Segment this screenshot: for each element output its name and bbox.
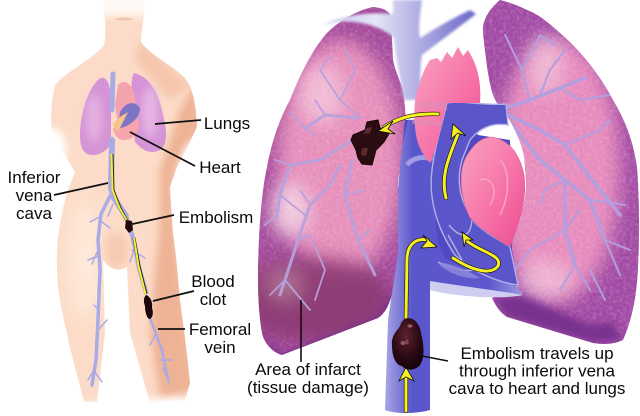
- yellow arrow: bottom of vena cava: [404, 377, 408, 411]
- leader lines, left figure: [54, 120, 201, 329]
- top vessels: [322, 0, 476, 100]
- soft fades at head, arms and feet: [90, 0, 160, 16]
- right lung: [480, 0, 640, 360]
- aorta (pink): [414, 47, 480, 163]
- body silhouette: [51, 0, 197, 403]
- label: Area of infarct: (tissue damage): [247, 378, 369, 397]
- label: Blood clot: Blood: [191, 272, 235, 291]
- label: Embolism travels up through inferior vena cava to heart and lungs: Embolism travels up: [460, 344, 614, 363]
- small lungs: [80, 73, 166, 155]
- yellow arrow: up pulmonary artery: [444, 134, 458, 198]
- small embolism: [125, 220, 133, 233]
- yellow arrow: into lung: [384, 114, 438, 127]
- small yellow path: [112, 154, 146, 294]
- label: Area of infarct: Area of infarct: [255, 360, 361, 379]
- leader: embolism: [422, 356, 448, 361]
- area of infarct: [237, 258, 393, 342]
- right heart chambers and pulmonary artery: [407, 102, 518, 285]
- label: Embolism travels up through inferior vena cava to heart and lungs: cava to heart and lungs: [449, 379, 625, 398]
- left ventricle (pink): [461, 137, 525, 247]
- panel: heart and lungs detail: [237, 0, 640, 413]
- pulmonary band across aorta: [412, 102, 447, 126]
- large embolism in lung: [351, 120, 390, 165]
- label: Femoral vein: Femoral: [189, 320, 251, 339]
- yellow arrow: through right ventricle: [453, 241, 499, 271]
- blood clot in vena cava: [392, 318, 424, 370]
- left lung: [258, 7, 406, 355]
- leader: infarct: [300, 300, 302, 362]
- main venous chamber and inferior vena cava: [385, 120, 523, 413]
- label: Embolism travels up through inferior vena cava to heart and lungs: through inferior vena: [459, 362, 616, 380]
- panel: full body figure: [8, 0, 253, 416]
- small heart: [113, 82, 140, 140]
- label: Inferior vena cava: Inferior: [8, 168, 61, 187]
- small vena cava and femoral veins: [88, 74, 172, 385]
- label: Femoral vein: vein: [204, 338, 236, 357]
- label: Heart: Heart: [199, 158, 241, 177]
- central blue backdrop joining the chambers: [398, 118, 518, 296]
- label: Blood clot: clot: [200, 290, 226, 309]
- label: Lungs: Lungs: [204, 114, 250, 133]
- yellow arrow: up vena cava: [406, 240, 428, 318]
- label: Inferior vena cava: vena: [16, 186, 53, 205]
- label: Embolism: Embolism: [179, 208, 253, 227]
- pale lower rim of right atrium: [430, 281, 523, 297]
- label: Inferior vena cava: cava: [16, 204, 52, 223]
- small blood clot: [144, 295, 153, 319]
